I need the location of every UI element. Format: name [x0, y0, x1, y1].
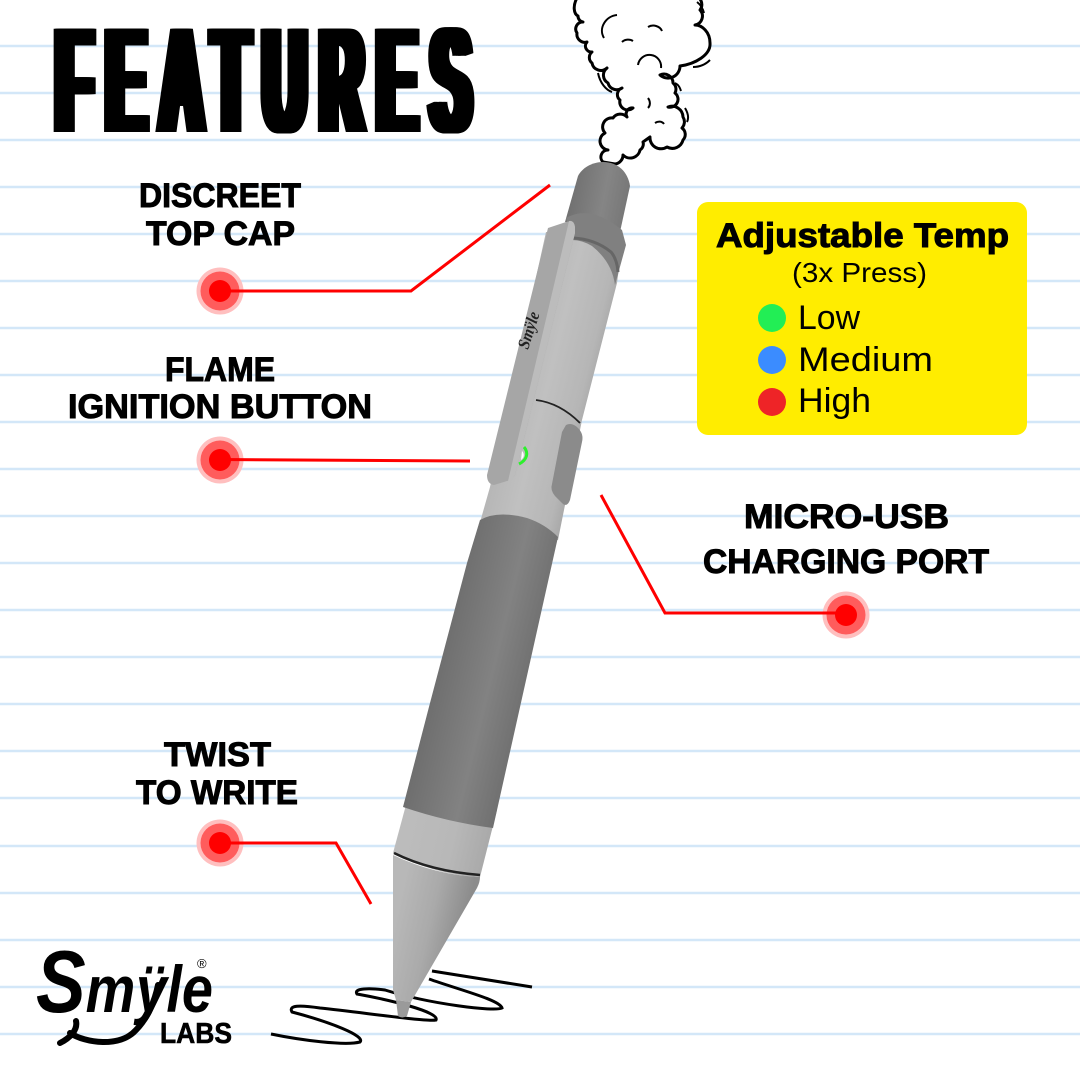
callout: micro-usb charging port: CHARGING PORT	[703, 543, 989, 581]
black ring	[536, 400, 580, 423]
scribble	[271, 971, 532, 1043]
pen illustration	[393, 162, 630, 1018]
logo: Smÿle	[36, 932, 213, 1031]
cone tip	[393, 855, 480, 1002]
logo: LABS	[160, 1018, 232, 1050]
clip highlight	[508, 221, 575, 481]
callout: twist to write: TWIST	[164, 736, 271, 774]
collar shadow band	[573, 238, 618, 272]
button	[551, 424, 582, 505]
title: FEATURES	[56, 0, 485, 164]
lower barrel	[393, 790, 497, 877]
panel: adjustable temp	[697, 202, 1027, 435]
callout: micro-usb charging port	[601, 495, 989, 638]
callout: discreet top cap	[139, 177, 550, 314]
rubber grip	[403, 514, 558, 828]
clip logo: Smÿle	[514, 309, 544, 351]
callout: flame ignition button	[68, 351, 470, 484]
panel: adjustable temp: Adjustable Temp	[716, 217, 1009, 255]
callout: discreet top cap: TOP CAP	[146, 215, 295, 253]
panel: adjustable temp: High	[798, 382, 871, 420]
callout: twist to write: TO WRITE	[136, 774, 298, 812]
green LED	[519, 447, 527, 464]
pen clip	[487, 222, 575, 485]
panel: adjustable temp: Medium	[798, 341, 933, 379]
metal point	[396, 1000, 411, 1018]
logo: ®	[197, 956, 207, 971]
panel: adjustable temp: Low	[798, 299, 860, 337]
callout: flame ignition button: IGNITION BUTTON	[68, 388, 372, 426]
pen body	[475, 232, 619, 540]
smoke cloud	[574, 0, 710, 164]
callout: flame ignition button: FLAME	[165, 351, 275, 389]
tip ring	[394, 853, 480, 875]
callout: twist to write	[136, 736, 371, 904]
panel: adjustable temp: (3x Press)	[792, 257, 927, 288]
callout: micro-usb charging port: MICRO-USB	[744, 498, 949, 536]
callout: discreet top cap: DISCREET	[139, 177, 301, 215]
pen top cap	[565, 162, 630, 232]
pen collar	[566, 213, 626, 285]
